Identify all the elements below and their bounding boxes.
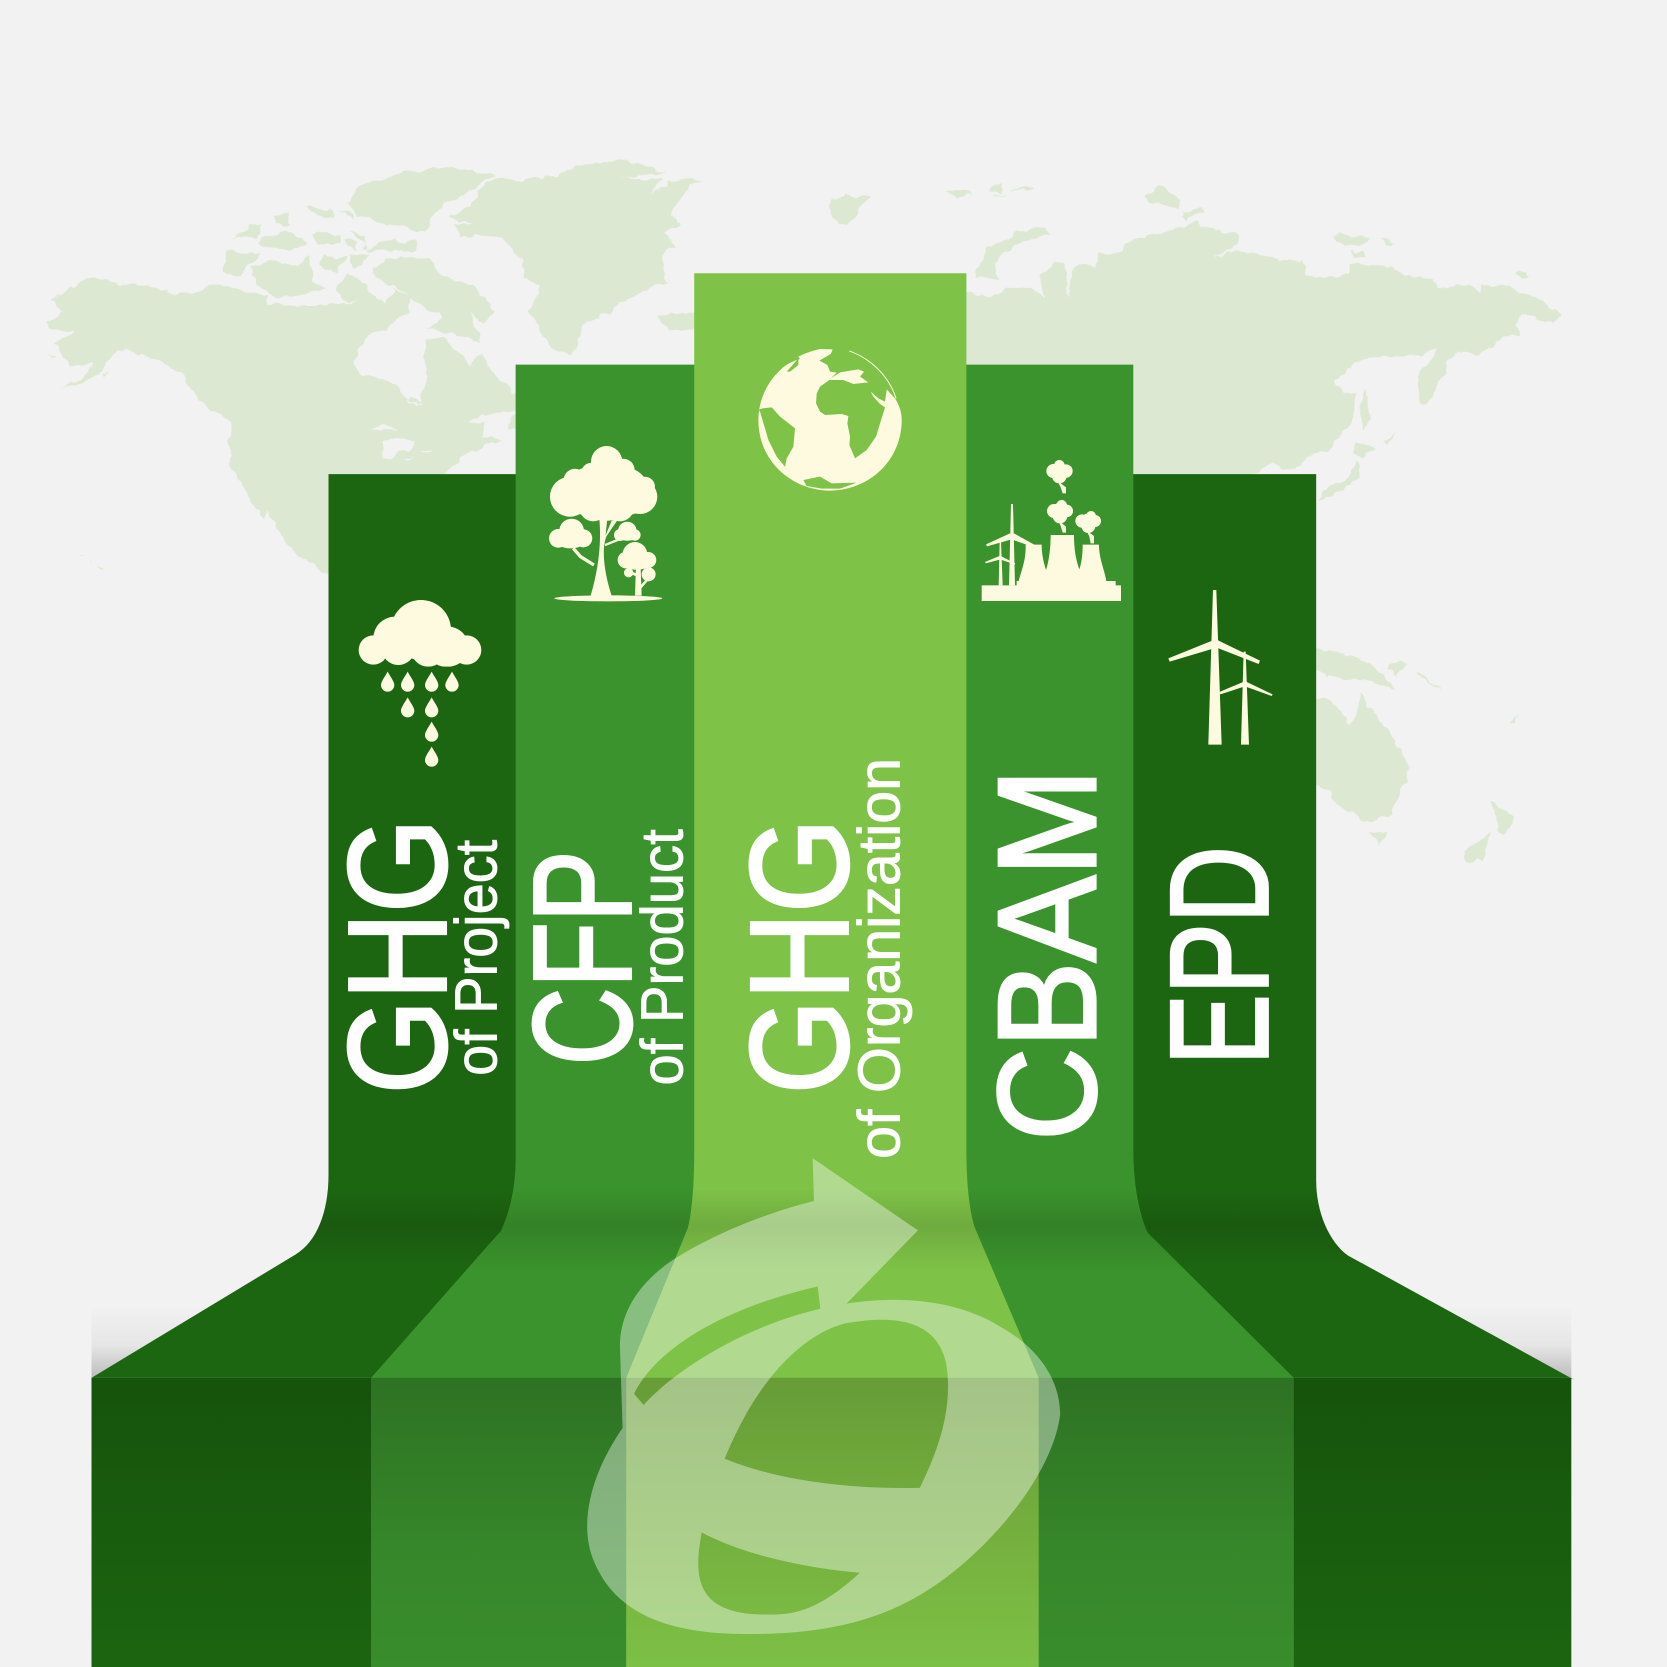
map: Eurasia and Oceania	[830, 182, 1563, 861]
label: GHG of Organization	[721, 758, 912, 1159]
column: dark outer pair, GHG of Project and EPD	[91, 474, 1575, 1380]
icon: wind turbines	[1168, 590, 1273, 745]
floor: light base band	[626, 1378, 1039, 1667]
icon: power plant with wind turbines	[982, 460, 1121, 601]
label: GHG of Organization: GHG	[721, 819, 877, 1094]
Australia	[1314, 693, 1410, 822]
label: EPD: EPD	[1141, 846, 1297, 1065]
icon: trees	[549, 446, 662, 601]
floor: dark base band	[91, 1378, 1571, 1667]
wall shadow behind stage	[91, 1306, 1571, 1378]
Japan	[1319, 434, 1396, 501]
icon: globe	[758, 349, 902, 491]
label: GHG of Organization: of Organization	[845, 758, 912, 1159]
column: medium pair, CFP of Product and CBAM	[371, 365, 1294, 1378]
label: GHG of Project: GHG	[319, 819, 475, 1094]
Baffin	[374, 257, 495, 343]
Iceland	[658, 311, 696, 331]
Victoria	[251, 255, 327, 296]
column: light center, GHG of Organization	[626, 273, 1039, 1378]
label: CFP of Product	[504, 829, 696, 1085]
label: CFP of Product: of Product	[629, 829, 696, 1085]
Banks	[222, 251, 262, 275]
icon: translucent recycling arrow	[587, 1158, 1060, 1634]
label: GHG of Project: of Project	[442, 839, 509, 1076]
Ellesmere	[348, 168, 495, 232]
New Zealand	[1464, 800, 1515, 861]
floor: medium base band	[371, 1378, 1294, 1667]
label: CFP of Product: CFP	[504, 851, 660, 1065]
Sakhalin	[1361, 388, 1370, 432]
world map	[48, 161, 1563, 861]
Greenland	[449, 161, 702, 355]
New Guinea and islands	[1314, 649, 1445, 692]
map: Americas	[48, 161, 702, 600]
label: CBAM: CBAM	[969, 769, 1125, 1141]
icon: cloud with rain	[359, 600, 481, 767]
